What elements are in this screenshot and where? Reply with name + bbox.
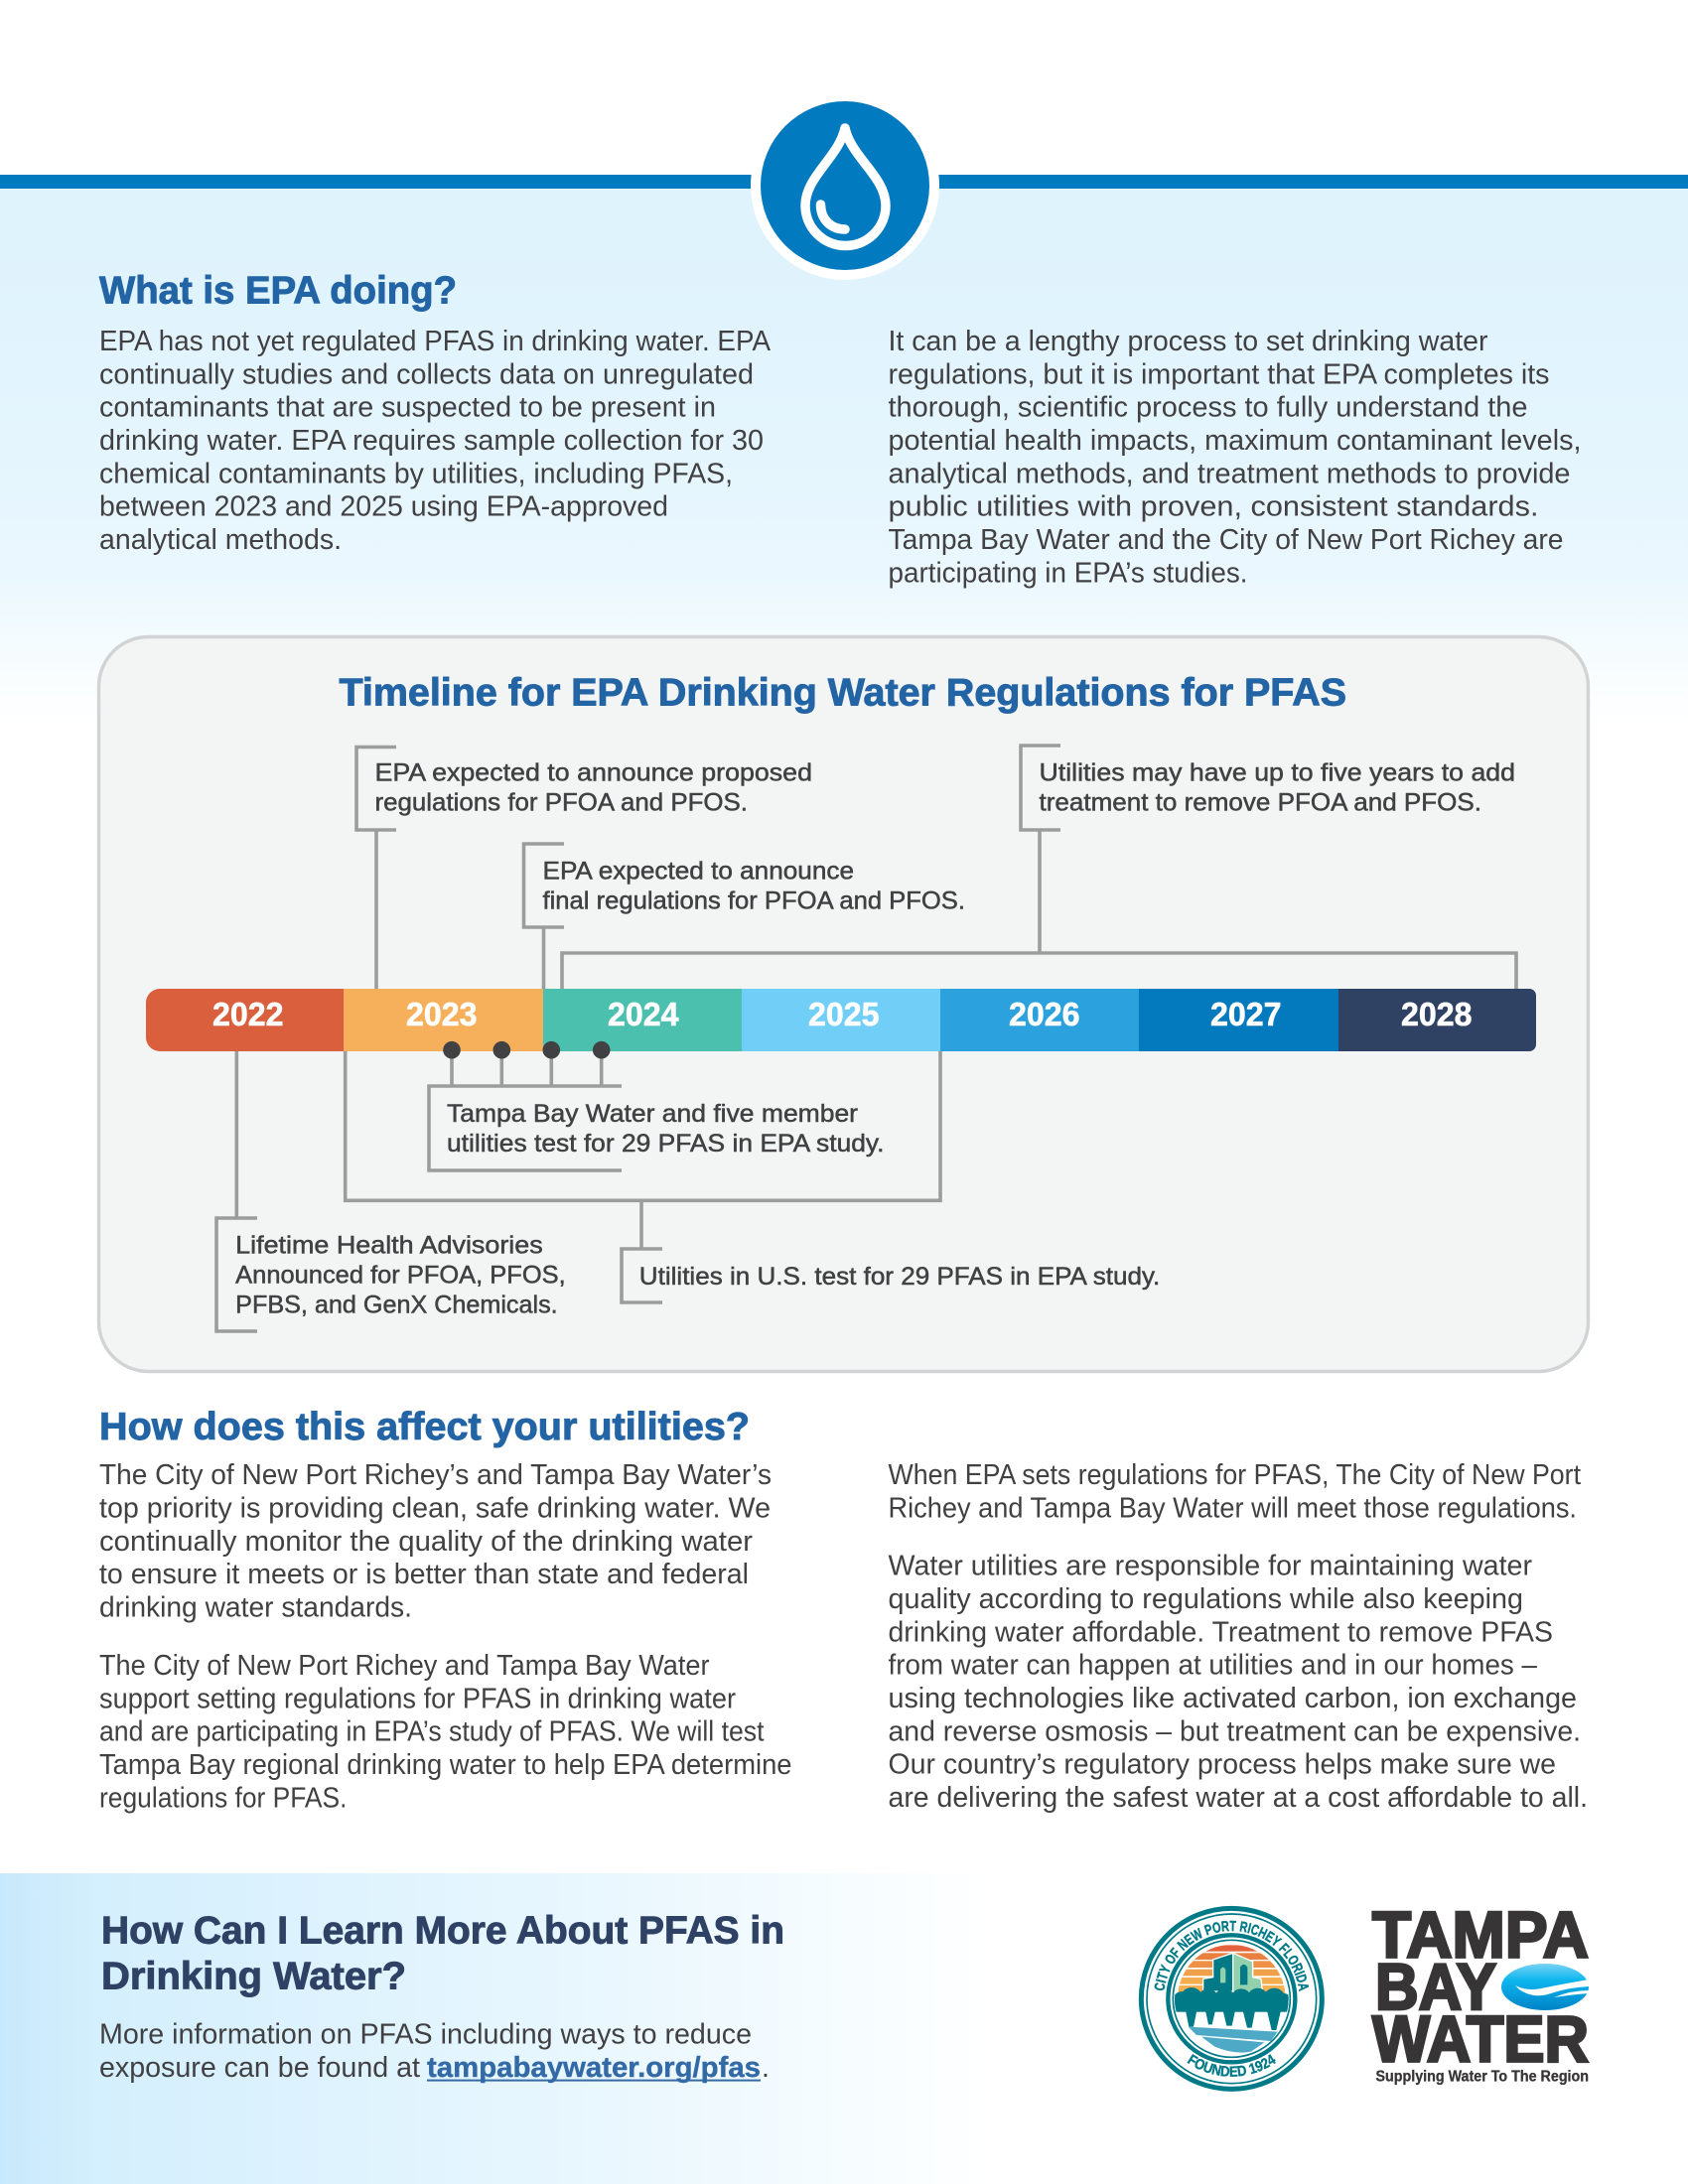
footer heading: How Can I Learn More About PFAS in (101, 1910, 784, 1953)
text block: EPA doing right column: thorough, scientific process to fully understand the (888, 392, 1527, 424)
year 2025 (742, 989, 940, 1051)
timeline bar (146, 989, 1536, 1051)
footer text with link: . (762, 2052, 770, 2084)
logo: City of New Port Richey seal: CITY OF NEW PORT RICHEY FLORIDA (1154, 1920, 1309, 1991)
text block: EPA doing left column: continually studies and collects data on unregulated (99, 358, 754, 390)
text block: utilities left column: The City of New Port Richey’s and Tampa Bay Water’s (99, 1459, 772, 1491)
footer text with link: More information on PFAS including ways to reduce (99, 2019, 752, 2051)
heading: How does this affect your utilities?: How does this affect your utilities? (99, 1406, 750, 1448)
timeline heading: Timeline for EPA Drinking Water Regulations for PFAS (340, 672, 1346, 715)
text block: utilities left column: drinking water standards. (99, 1592, 412, 1624)
year 2024 (543, 989, 742, 1051)
text block: utilities left column: and are participating in EPA’s study of PFAS. We will test (99, 1716, 765, 1748)
year 2025: 2025 (808, 996, 880, 1032)
logo: Tampa Bay Water: BAY (1375, 1950, 1496, 2023)
callout: proposed regulations: EPA expected to announce proposed (375, 759, 812, 787)
logo: Tampa Bay Water: Supplying Water To The Region (1376, 2069, 1589, 2086)
year 2022 (146, 989, 344, 1051)
text block: utilities right column: using technologies like activated carbon, ion exchange (888, 1683, 1577, 1714)
text block: utilities right column: Water utilities are responsible for maintaining water (888, 1551, 1533, 1582)
text block: EPA doing right column (888, 326, 1581, 589)
header band (0, 175, 1688, 189)
text block: utilities right column: quality according to regulations while also keeping (888, 1583, 1523, 1615)
callout: lifetime health advisories: Announced for PFOA, PFOS, (235, 1262, 566, 1290)
text block: EPA doing left column: contaminants that are suspected to be present in (99, 392, 716, 424)
text block: EPA doing right column: It can be a lengthy process to set drinking water (888, 326, 1488, 357)
text block: EPA doing right column: analytical methods, and treatment methods to provide (888, 458, 1571, 489)
text block: utilities right column: from water can happen at utilities and in our homes – (888, 1650, 1537, 1682)
icon: water drop badge (751, 91, 939, 280)
text block: utilities left column: Tampa Bay regional drinking water to help EPA determine (99, 1749, 792, 1781)
text block: EPA doing right column: participating in EPA’s studies. (888, 557, 1247, 589)
callout: final regulations: EPA expected to announce (542, 858, 854, 886)
footer heading (101, 1910, 784, 1997)
logo: Tampa Bay Water: TAMPA (1372, 1898, 1589, 1972)
footer text with link: tampabaywater.org/pfas (427, 2052, 761, 2084)
text block: utilities right column: Our country’s regulatory process helps make sure we (888, 1749, 1556, 1781)
footer background gradient (0, 1873, 1688, 2184)
callout: proposed regulations: regulations for PFOA and PFOS. (375, 789, 748, 817)
callout: utilities in U.S. test: Utilities in U.S. test for 29 PFAS in EPA study. (639, 1263, 1160, 1291)
text block: utilities right column: Richey and Tampa Bay Water will meet those regulations. (888, 1493, 1577, 1525)
text block: EPA doing left column: drinking water. EPA requires sample collection for 30 (99, 425, 764, 457)
footer text with link: exposure can be found at (99, 2052, 420, 2084)
year 2024: 2024 (608, 996, 679, 1032)
callout: utilities in U.S. test (346, 1051, 1160, 1302)
logo: City of New Port Richey seal: FOUNDED 1924 (1188, 2054, 1276, 2077)
year 2028: 2028 (1401, 996, 1472, 1032)
year 2027: 2027 (1210, 996, 1281, 1032)
callout: Tampa Bay Water member utilities test: utilities test for 29 PFAS in EPA study. (447, 1130, 884, 1158)
callout: final regulations: final regulations for PFOA and PFOS. (542, 887, 965, 915)
text block: utilities right column: and reverse osmosis – but treatment can be expensive. (888, 1715, 1581, 1747)
logo: City of New Port Richey seal (1138, 1906, 1325, 2092)
icon: water oval (1501, 1964, 1589, 2010)
callout: proposed regulations (356, 747, 812, 989)
heading: What is EPA doing?: What is EPA doing? (99, 270, 457, 313)
text block: EPA doing left column (99, 326, 771, 556)
text block: utilities right column: drinking water affordable. Treatment to remove PFAS (888, 1616, 1553, 1648)
year 2027 (1139, 989, 1338, 1051)
top background gradient (0, 189, 1688, 745)
footer heading: Drinking Water? (101, 1956, 406, 1997)
panel: timeline (99, 637, 1589, 1372)
footer text with link (99, 2019, 770, 2084)
callout: Tampa Bay Water member utilities test (429, 1041, 884, 1170)
panel background (99, 637, 1589, 1372)
text block: utilities left column (99, 1459, 792, 1814)
text block: utilities left column: top priority is providing clean, safe drinking water. We (99, 1493, 771, 1525)
text block: utilities left column: regulations for PFAS. (99, 1782, 348, 1814)
text block: utilities left column: support setting regulations for PFAS in drinking water (99, 1683, 736, 1714)
text block: EPA doing left column: EPA has not yet regulated PFAS in drinking water. EPA (99, 326, 771, 357)
text block: EPA doing right column: potential health impacts, maximum contaminant levels, (888, 425, 1581, 457)
callout: final regulations (524, 844, 965, 989)
logo: Tampa Bay Water: WATER (1372, 2001, 1589, 2075)
year 2028 (1338, 989, 1536, 1051)
callout: five years to add treatment: Utilities may have up to five years to add (1039, 759, 1515, 787)
year 2022: 2022 (212, 996, 284, 1032)
year 2023: 2023 (406, 996, 477, 1032)
callout: lifetime health advisories (216, 1051, 566, 1331)
text block: EPA doing left column: chemical contaminants by utilities, including PFAS, (99, 458, 733, 489)
year 2026: 2026 (1009, 996, 1080, 1032)
logo: Tampa Bay Water (1372, 1898, 1589, 2086)
text block: EPA doing right column: Tampa Bay Water and the City of New Port Richey are (888, 524, 1563, 556)
callout: five years to add treatment (562, 746, 1516, 989)
callout: Tampa Bay Water member utilities test: Tampa Bay Water and five member (447, 1100, 858, 1128)
callout: lifetime health advisories: PFBS, and GenX Chemicals. (235, 1292, 558, 1319)
text block: EPA doing right column: public utilities with proven, consistent standards. (888, 491, 1539, 523)
text block: EPA doing left column: analytical methods. (99, 524, 342, 556)
callout: lifetime health advisories: Lifetime Health Advisories (235, 1232, 543, 1260)
text block: utilities right column: are delivering the safest water at a cost affordable to all. (888, 1782, 1588, 1814)
callout: five years to add treatment: treatment to remove PFOA and PFOS. (1039, 789, 1481, 817)
text block: utilities left column: to ensure it meets or is better than state and federal (99, 1559, 749, 1590)
text block: EPA doing right column: regulations, but it is important that EPA completes its (888, 358, 1549, 390)
text block: utilities left column: continually monitor the quality of the drinking water (99, 1526, 754, 1558)
year 2026 (940, 989, 1139, 1051)
text block: utilities right column: When EPA sets regulations for PFAS, The City of New Port (888, 1459, 1581, 1491)
text block: EPA doing left column: between 2023 and 2025 using EPA-approved (99, 491, 668, 523)
text block: utilities right column (888, 1459, 1588, 1814)
text block: utilities left column: The City of New Port Richey and Tampa Bay Water (99, 1650, 710, 1682)
year 2023 (344, 989, 543, 1051)
